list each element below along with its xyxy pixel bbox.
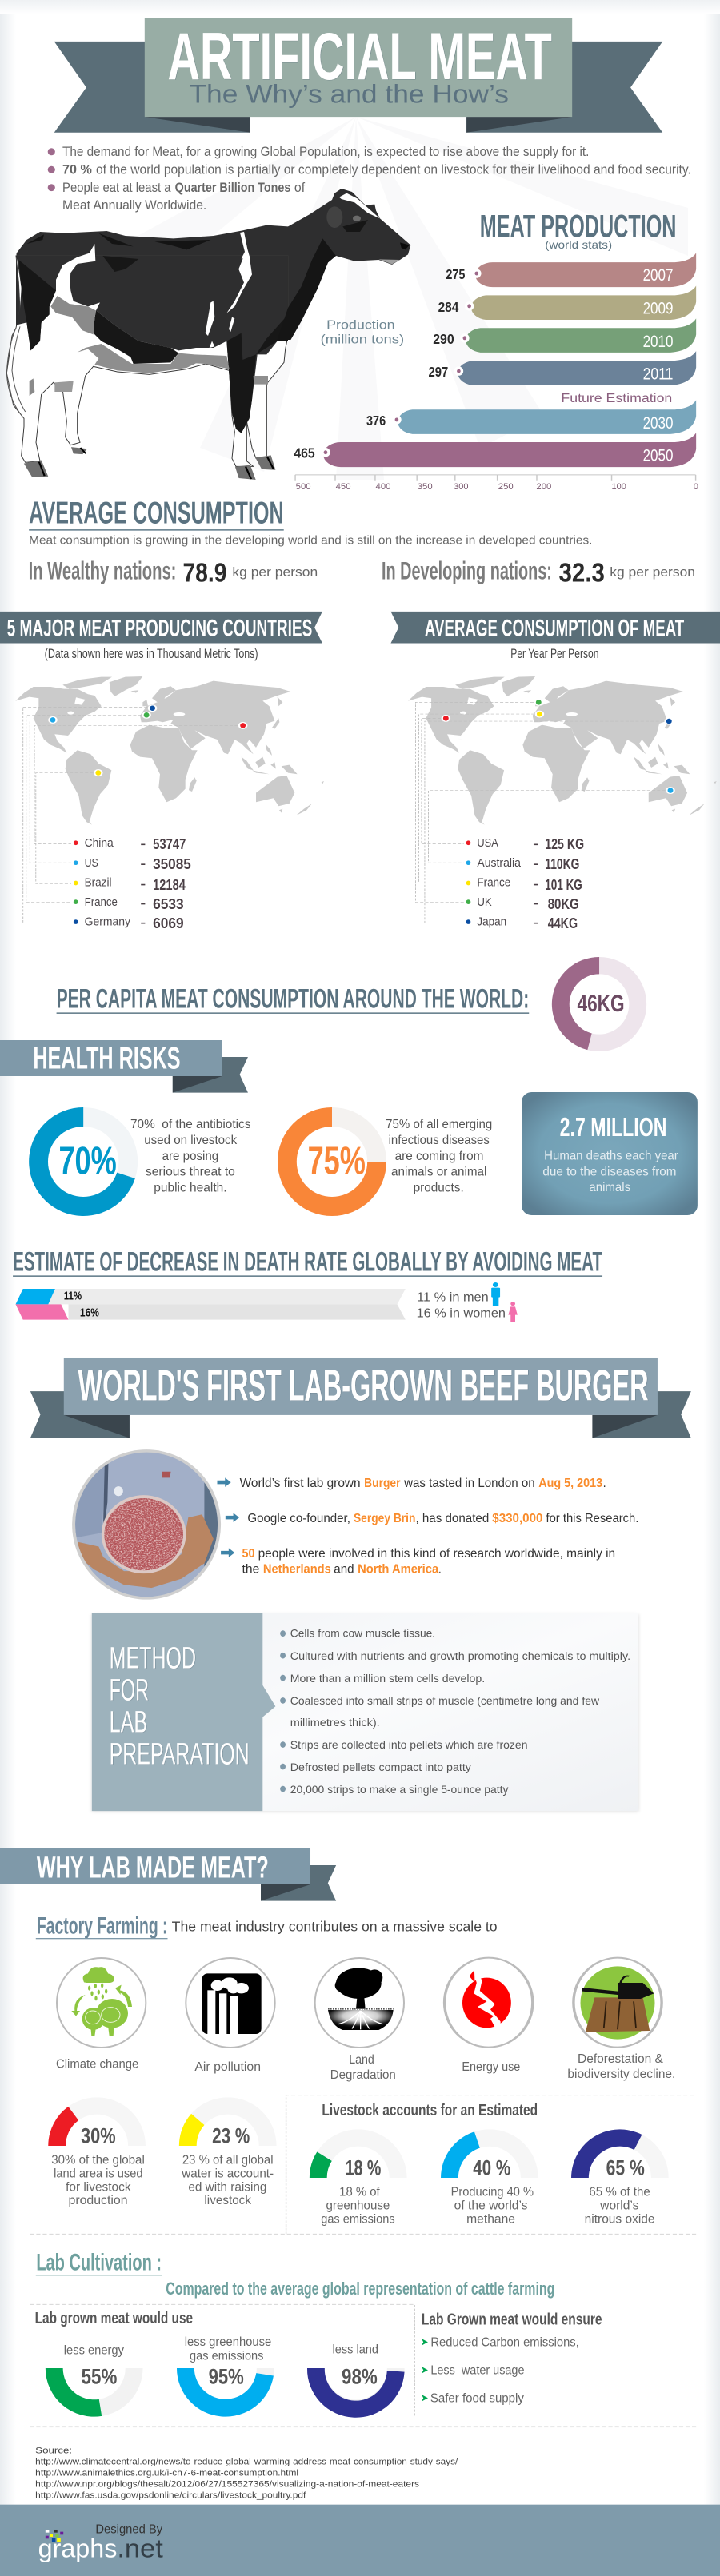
arrow: fact one [217,1477,231,1487]
gauge: greenhouse 18 percent: 18 % of [339,2184,380,2199]
legend: consumption per person: 125 KG [545,835,584,852]
banner: average consumption of meat [390,612,720,661]
intro bullets: of [294,181,305,195]
gauge: less energy: less energy [64,2343,124,2357]
legend: producing countries: France [85,895,118,908]
lab grown benefits list [422,2311,602,2405]
gauge: nitrous oxide 65 percent: world’s [599,2198,639,2212]
bar 2007: 275 [446,266,466,282]
banner: producing countries [0,612,322,661]
stat: developing nations: kg per person [610,565,695,580]
bar 2010: 290 [433,332,454,347]
bar 2030 [366,400,696,434]
bar 2010: 2010 [643,333,673,351]
text: infectious diseases: animals or animal [391,1164,486,1178]
text: infectious diseases: 75% of all emerging [386,1117,492,1131]
gauge: less land: less land [333,2342,378,2356]
gauge: land area 30 percent: 30% [81,2124,116,2147]
fact one: . [603,1476,606,1490]
footer [0,2505,720,2576]
bar 2050 [294,433,696,467]
sources [35,2446,458,2500]
donut: 70 percent [29,1107,138,1216]
icon captions [56,2052,675,2082]
future estimation label: Future Estimation [561,392,672,405]
intro bullets: Quarter Billion Tones [175,181,290,195]
gauge: less greenhouse gas [177,2335,274,2417]
callout: 2.7 million: animals [589,1180,630,1194]
donut: 75 percent: 75% [308,1138,366,1182]
average consumption heading: AVERAGE CONSUMPTION [29,496,284,530]
fact two: $330,000 [492,1511,542,1525]
chart axis: 250 [498,481,514,491]
fact one: Aug 5, 2013 [538,1476,602,1490]
gauge: greenhouse 18 percent: 18 % [346,2156,381,2179]
method steps [280,1627,630,1796]
chart axis [295,475,698,491]
gauge: methane 40 percent: of the world’s [454,2198,528,2212]
bar 2007 [446,253,696,287]
fact two: for this Research. [546,1511,638,1525]
lab grown benefits list: Safer food supply [430,2391,524,2405]
fact three [242,1546,615,1577]
factory farming heading: Factory Farming : [37,1912,168,1939]
factory farming heading: The meat industry contributes on a massive scale to [172,1920,498,1935]
lab cultivation heading: Lab Cultivation : [36,2249,162,2275]
meat production heading: (world stats) [545,239,612,251]
fact three: North America [358,1562,439,1577]
bar chart: meat production [294,253,698,491]
bar 2030: 376 [366,413,386,429]
method steps: Strips are collected into pellets which are frozen [290,1738,528,1751]
legend: producing countries: 6069 [153,915,184,931]
legend: consumption per person: UK [477,895,492,908]
production axis label: Production [326,318,395,333]
gauge: less energy [46,2343,143,2417]
title ribbon [54,18,662,133]
chart axis: 100 [612,481,626,491]
text: antibiotics: serious threat to [146,1164,235,1178]
gauge: water 23 percent: 23 % of all global [182,2152,274,2167]
icon captions: Deforestation & [578,2052,663,2066]
burger facts [217,1476,638,1577]
stat: wealthy nations: 78.9 [182,557,227,588]
fact three: Netherlands [263,1562,331,1577]
legend: producing countries: 53747 [153,835,186,852]
stat: wealthy nations: In Wealthy nations: [29,557,176,585]
legend: producing countries: Brazil [85,875,111,889]
text: antibiotics: used on livestock [144,1133,238,1147]
method steps: Cells from cow muscle tissue. [290,1627,435,1640]
chart axis: 400 [376,481,391,491]
map: consumption per person [408,676,717,923]
sources: http://www.fas.usda.gov/psdonline/circulars/livestock_poultry.pdf [35,2490,306,2500]
legend: producing countries: 12184 [153,876,186,893]
title ribbon: The Why’s and the How’s [189,80,509,109]
gauge: land area 30 percent [48,2097,146,2207]
livestock emissions frame [286,2095,694,2234]
legend: consumption per person: France [477,875,510,889]
stat: wealthy nations: kg per person [232,565,318,580]
chart axis: 300 [454,481,469,491]
fact two: Sergey Brin [354,1511,415,1525]
legend: producing countries: 35085 [153,855,191,872]
panel: method for lab preparation: PREPARATION [110,1737,250,1771]
panel: method for lab preparation: FOR [110,1673,149,1707]
legend: consumption per person: Australia [477,856,521,869]
gauge: land area 30 percent: 30% of the global [51,2152,145,2167]
gauge: nitrous oxide 65 percent: 65 % [606,2156,645,2179]
gauge: less energy: 55% [82,2365,117,2388]
text: infectious diseases [386,1117,492,1194]
donut: 75 percent [278,1107,386,1216]
sources: http://www.animalethics.org.uk/i-ch7-6-meat-consumption.html [35,2468,298,2478]
section: per capita and health risks [0,957,698,1322]
stat: developing nations: 32.3 [559,557,605,588]
icon captions: Degradation [330,2068,396,2082]
legend: consumption per person: USA [477,836,498,849]
arrow: fact two [226,1513,239,1522]
icon: air pollution [186,1958,275,2048]
panel: method for lab preparation: LAB [110,1705,147,1739]
fact three: and [334,1562,354,1577]
icon captions: Air pollution [194,2060,261,2074]
map: producing countries [15,676,324,923]
fact two: Google co-founder, [247,1511,350,1525]
gauge: water 23 percent: ed with raising [188,2179,266,2194]
banner: producing countries: (Data shown here was in Thousand Metric Tons) [45,647,258,661]
bar 2007: 2007 [643,266,673,285]
gauge: water 23 percent [179,2097,277,2207]
intro bullets: People eat at least a [62,181,171,195]
illustration: holstein cow [6,189,410,480]
bar 2050: 465 [294,445,315,461]
intro bullets [48,145,691,213]
method steps: Defrosted pellets compact into patty [290,1761,471,1773]
gauge: water 23 percent: livestock [204,2193,251,2207]
callout: 2.7 million [522,1092,698,1215]
icon captions: Energy use [462,2060,520,2074]
icon: deforestation [574,1958,662,2048]
intro bullets: 70 % [62,163,92,177]
section: consumption and maps: 5 MAJOR MEAT PRODUCING COUNTRIES [7,615,312,641]
section: consumption and maps [0,496,720,931]
gauge: nitrous oxide 65 percent [571,2129,669,2226]
gauge: greenhouse 18 percent: gas emissions [321,2211,395,2226]
bar 2011 [429,351,696,385]
icon: energy use [445,1958,533,2048]
bar 2009: 2009 [643,300,673,318]
fact three: the [242,1562,259,1577]
text: antibiotics: are posing [162,1149,218,1163]
gauge: less greenhouse gas: less greenhouse [185,2335,271,2349]
lab grown benefits list: Reduced Carbon emissions, [430,2335,579,2349]
fact two: , has donated [415,1511,489,1525]
gauge: nitrous oxide 65 percent: nitrous oxide [585,2211,654,2226]
method steps: More than a million stem cells develop. [290,1672,485,1685]
chart: death rate decrease: 11% [64,1290,82,1302]
gauge: less land: 98% [342,2365,378,2388]
gauge: methane 40 percent: 40 % [473,2156,510,2179]
gauge: land area 30 percent: production [69,2193,128,2207]
section: lab cultivation and footer: Lab grown meat would use [35,2309,193,2327]
text: antibiotics: 70% of the antibiotics [130,1117,250,1131]
legend: consumption per person: 101 KG [545,876,582,893]
legend: consumption per person: 80KG [548,895,579,912]
bar 2050: 2050 [643,447,673,465]
legend: consumption per person [466,835,584,931]
gauge: methane 40 percent: methane [466,2211,515,2226]
gauge: nitrous oxide 65 percent: 65 % of the [589,2184,650,2199]
gauge: less land [307,2342,405,2418]
donut: 46 kg: 46KG [577,991,625,1016]
gauge: water 23 percent: water is account- [182,2166,274,2180]
fact three: 50 [242,1546,255,1561]
legend: producing countries [74,835,191,931]
panel: method for lab preparation: METHOD [110,1641,196,1675]
bar 2011: 2011 [643,365,673,384]
fact one [240,1476,606,1490]
gauge: greenhouse 18 percent: greenhouse [326,2198,390,2212]
icon: woman [508,1302,518,1322]
gauge: greenhouse 18 percent [310,2129,407,2226]
bar 2009 [438,286,696,320]
chart: death rate decrease [16,1289,506,1320]
gauge: less greenhouse gas: 95% [209,2365,244,2388]
chart axis: 200 [536,481,552,491]
production axis label: (million tons) [321,333,404,346]
text: infectious diseases: products. [414,1180,464,1194]
donut: 46 kg [552,957,646,1051]
arrow: fact three [221,1548,234,1557]
sources: Source: [35,2446,72,2455]
chart axis: 500 [296,481,311,491]
ribbon: health risks: HEALTH RISKS [33,1040,181,1075]
chart axis: 0 [694,481,698,491]
legend: producing countries: China [85,836,114,849]
icon captions: Land [349,2052,374,2067]
bar 2030: 2030 [643,414,673,433]
donut: 70 percent: 70% [58,1138,117,1182]
footer: Designed By [95,2522,162,2536]
text: antibiotics [130,1117,250,1194]
lab grown benefits list: Less water usage [430,2363,524,2377]
text: antibiotics: public health. [154,1180,227,1194]
bar 2010 [433,318,696,353]
bar 2011: 297 [429,364,448,380]
legend: consumption per person: Japan [477,915,506,928]
panel: method for lab preparation [92,1613,638,1811]
section: lab cultivation and footer [0,2234,720,2576]
gauge: less greenhouse gas: gas emissions [190,2348,264,2363]
icon: man [491,1282,500,1306]
production axis label [321,318,404,346]
intro bullets: Meat Annually Worldwide. [62,198,206,213]
legend: producing countries: 6533 [153,895,184,912]
fact three: . [438,1562,442,1577]
icon: climate change [57,1958,146,2048]
method steps: millimetres thick). [290,1717,380,1729]
chart: death rate decrease: 11 % in men [417,1290,489,1304]
ribbon: why lab made meat [0,1848,336,1901]
fact one: was tasted in London on [403,1476,535,1490]
section: why lab made meat: WHY LAB MADE MEAT? [37,1850,269,1884]
footer: graphs [38,2534,117,2562]
sources: http://www.climatecentral.org/news/to-reduce-global-warming-address-meat-consumption-study-says/ [35,2457,458,2466]
bar 2009: 284 [438,299,458,315]
gauge: land area 30 percent: land area is used [54,2166,143,2180]
section: header and production [48,18,698,491]
footer: .net [117,2534,163,2562]
fact one: World’s first lab grown [240,1476,361,1490]
icon: land degradation [315,1958,404,2048]
legend: producing countries: US [85,856,98,869]
banner: average consumption of meat: Per Year Per Person [510,647,598,661]
gauge: methane 40 percent [441,2129,538,2226]
gauge: land area 30 percent: for livestock [66,2179,131,2194]
fact one: Burger [364,1476,401,1490]
chart axis: 350 [418,481,433,491]
legend: consumption per person: 44KG [548,915,578,931]
section: lab grown burger [30,1358,691,1811]
chart: death rate decrease: 16 % in women [417,1306,506,1320]
chart: death rate decrease: 16% [80,1306,99,1319]
ribbon: first lab grown burger [30,1358,691,1438]
section: why lab made meat [0,1848,694,2234]
fact two [247,1511,638,1525]
gauge: water 23 percent: 23 % [212,2124,250,2147]
legend: producing countries: Germany [85,915,130,928]
lab cultivation heading [36,2249,554,2299]
photo: lab grown patty in hand [69,1447,225,1603]
chart axis: 450 [336,481,351,491]
average consumption heading [29,496,592,547]
method steps: 20,000 strips to make a single 5-ounce patty [290,1783,509,1796]
ribbon: health risks [0,1040,248,1093]
text: infectious diseases: are coming from [395,1149,483,1163]
icon captions: Climate change [56,2056,138,2071]
legend: consumption per person: 110KG [545,855,579,872]
sources: http://www.npr.org/blogs/thesalt/2012/06/27/155527365/visualizing-a-nation-of-meat-eaters [35,2479,419,2489]
text: infectious diseases: infectious diseases [389,1133,490,1147]
gauge: methane 40 percent: Producing 40 % [451,2184,534,2199]
